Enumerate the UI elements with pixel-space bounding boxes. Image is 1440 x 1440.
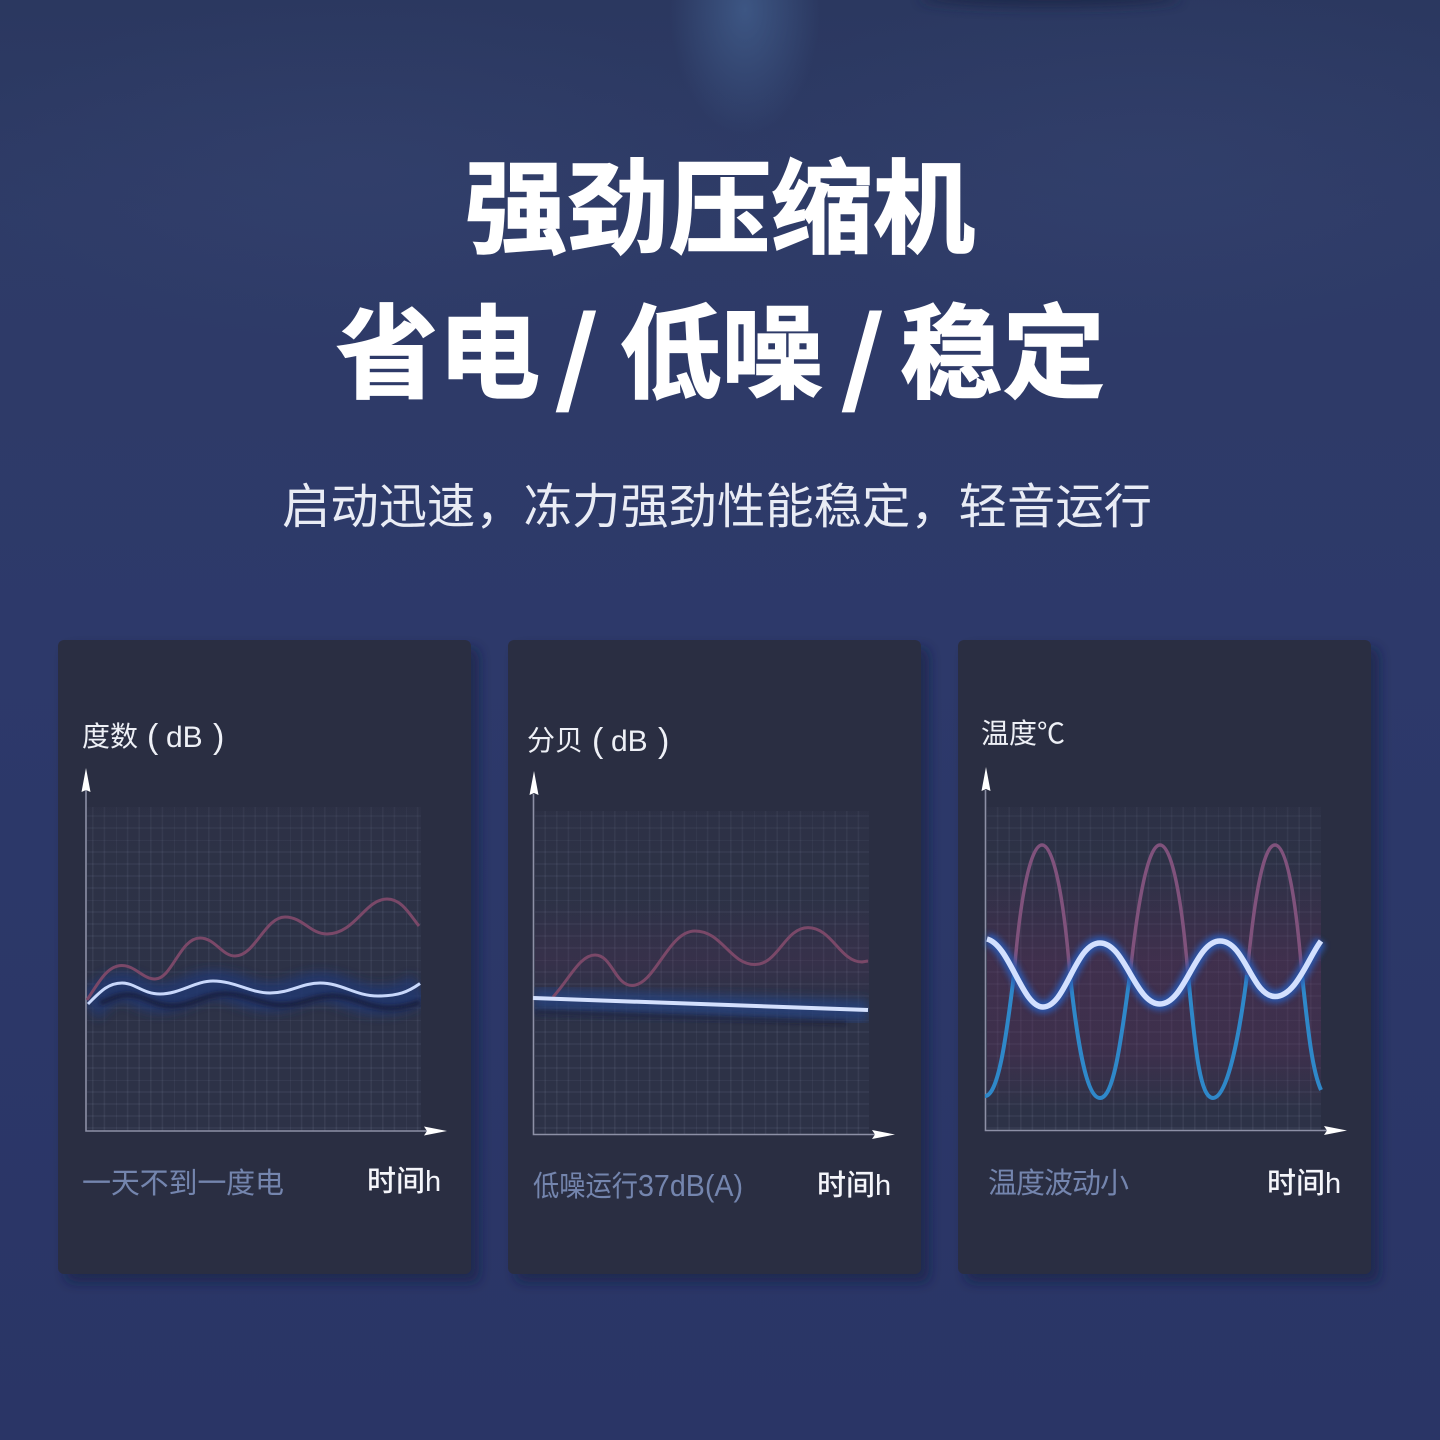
line: conventional: [87, 899, 419, 1000]
line: temperature swing cool: [985, 975, 1321, 1098]
chart: temperature lines: [982, 767, 1347, 1135]
heading line 1: 强劲压缩机: [465, 153, 975, 267]
axis title: degrees: dB: [166, 721, 203, 754]
axis title: temperature: 温度℃: [981, 718, 1065, 749]
caption: 温度波动小: [988, 1167, 1129, 1200]
heading line 2: 低噪: [620, 298, 823, 412]
heading line 2: 稳定: [900, 298, 1105, 412]
heading line 2: /: [843, 287, 881, 439]
caption: 37dB(A): [638, 1168, 743, 1203]
axis title: decibels: dB: [611, 725, 648, 758]
caption: [533, 1168, 743, 1203]
axis title: degrees: ): [213, 718, 224, 756]
caption: 一天不到一度电: [82, 1167, 284, 1200]
caption: 低噪运行: [533, 1170, 638, 1203]
axis title: degrees: [82, 718, 224, 756]
chart: noise lines: [530, 771, 895, 1139]
axis title: decibels: [527, 722, 669, 760]
panel: temperature stability: [958, 640, 1371, 1274]
line: temperature swing warm: [1014, 845, 1302, 975]
subtitle: 启动迅速，冻力强劲性能稳定，轻音运行: [282, 481, 1152, 534]
axis title: decibels: 分贝: [527, 725, 583, 756]
line: this compressor: [533, 998, 868, 1010]
heading line 2: [336, 287, 1105, 439]
line: this compressor: [88, 981, 420, 1004]
panel: noise level: [508, 640, 921, 1274]
axis title: degrees: 度数: [82, 721, 138, 752]
axis title: degrees: (: [147, 718, 159, 756]
x axis label: 时间h: [817, 1169, 891, 1202]
line: conventional: [553, 928, 868, 997]
x axis label: 时间h: [367, 1165, 441, 1198]
x axis label: 时间h: [1267, 1167, 1341, 1200]
heading line 2: /: [557, 287, 595, 439]
heading line 2: 省电: [336, 298, 540, 412]
line: this compressor: [987, 939, 1321, 1007]
axis title: decibels: (: [592, 722, 604, 760]
axis title: decibels: ): [658, 722, 669, 760]
panel: daily energy use: [58, 640, 471, 1274]
chart: energy consumption lines: [82, 768, 447, 1136]
